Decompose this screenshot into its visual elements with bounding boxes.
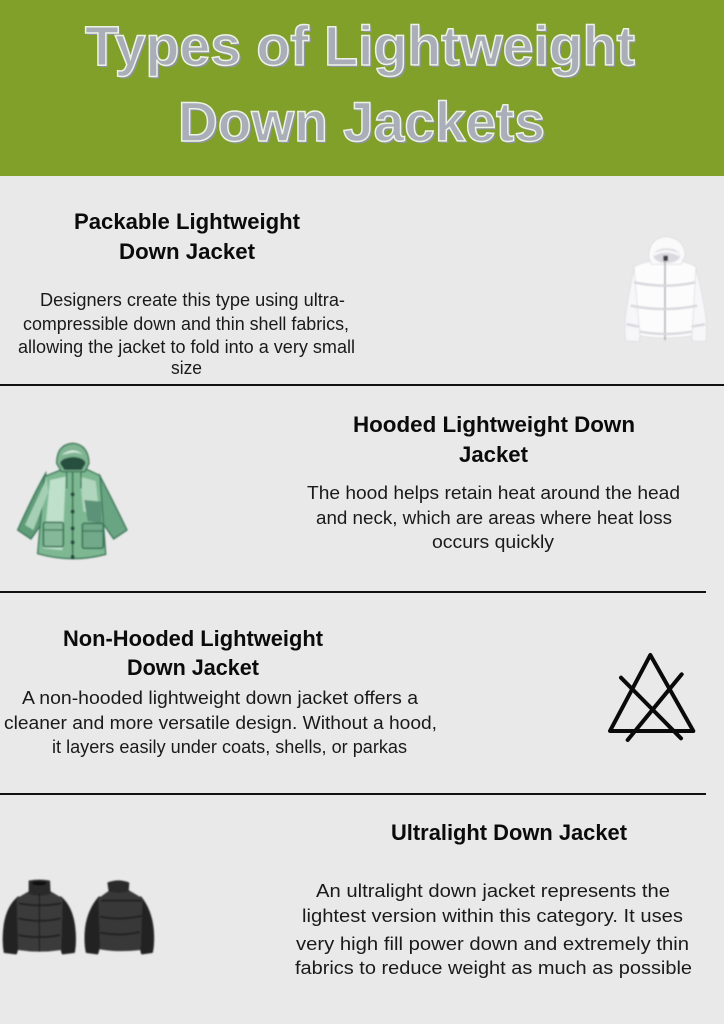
- heading: packable: Packable Lightweight: [74, 209, 301, 234]
- heading: ultralight: Ultralight Down Jacket: [391, 820, 628, 845]
- text: hooded description: The hood helps retain heat around the head: [307, 483, 680, 503]
- heading: hooded: Jacket: [459, 442, 529, 467]
- divider: [0, 591, 706, 593]
- text: non-hooded description: A non-hooded lightweight down jacket offers a: [22, 688, 419, 708]
- text: packable description: Designers create this type using ultra-: [40, 290, 345, 310]
- text: packable description: allowing the jacket to fold into a very small: [18, 337, 355, 357]
- heading: non-hooded: Non-Hooded Lightweight: [63, 626, 324, 651]
- text: ultralight description: fabrics to reduce weight as much as possible: [295, 958, 692, 978]
- panel: ultralight jacket: [4, 820, 692, 978]
- heading: non-hooded: [63, 626, 324, 680]
- title: Down Jackets: [180, 92, 547, 155]
- icon: white puffer jacket: [625, 237, 707, 342]
- heading: hooded: [353, 412, 635, 467]
- text: packable description: [18, 290, 355, 378]
- heading: packable: [74, 209, 301, 264]
- heading: non-hooded: Down Jacket: [127, 655, 260, 680]
- title: Down Jackets: [178, 90, 545, 153]
- text: ultralight description: An ultralight down jacket represents the: [316, 881, 670, 901]
- text: packable description: size: [171, 358, 202, 378]
- text: hooded description: and neck, which are areas where heat loss: [316, 508, 672, 528]
- panel: hooded jacket: [18, 412, 680, 559]
- text: ultralight description: very high fill power down and extremely thin: [296, 934, 689, 954]
- text: packable description: compressible down and thin shell fabrics,: [23, 314, 349, 334]
- heading: packable: Down Jacket: [119, 239, 256, 264]
- title: Types of Lightweight: [85, 14, 635, 77]
- panel: non-hooded jacket: [4, 626, 693, 757]
- text: hooded description: occurs quickly: [432, 532, 554, 552]
- panel: packable jacket: [18, 209, 707, 378]
- heading: hooded: Hooded Lightweight Down: [353, 412, 635, 437]
- title: Types of Lightweight: [87, 16, 637, 79]
- text: ultralight description: lightest version within this category. It uses: [302, 906, 683, 926]
- title: [85, 14, 637, 155]
- text: non-hooded description: it layers easily under coats, shells, or parkas: [52, 737, 407, 757]
- icon: green raincoat: [18, 443, 127, 559]
- header banner: [0, 0, 724, 176]
- text: non-hooded description: [4, 688, 437, 757]
- divider: [0, 384, 724, 386]
- text: hooded description: [307, 483, 680, 552]
- text: non-hooded description: cleaner and more versatile design. Without a hood,: [4, 713, 437, 733]
- icon: crossed-out triangle: [610, 655, 693, 740]
- text: ultralight description: [295, 881, 692, 978]
- divider: [0, 793, 706, 795]
- icon: black puffer jackets: [4, 880, 153, 953]
